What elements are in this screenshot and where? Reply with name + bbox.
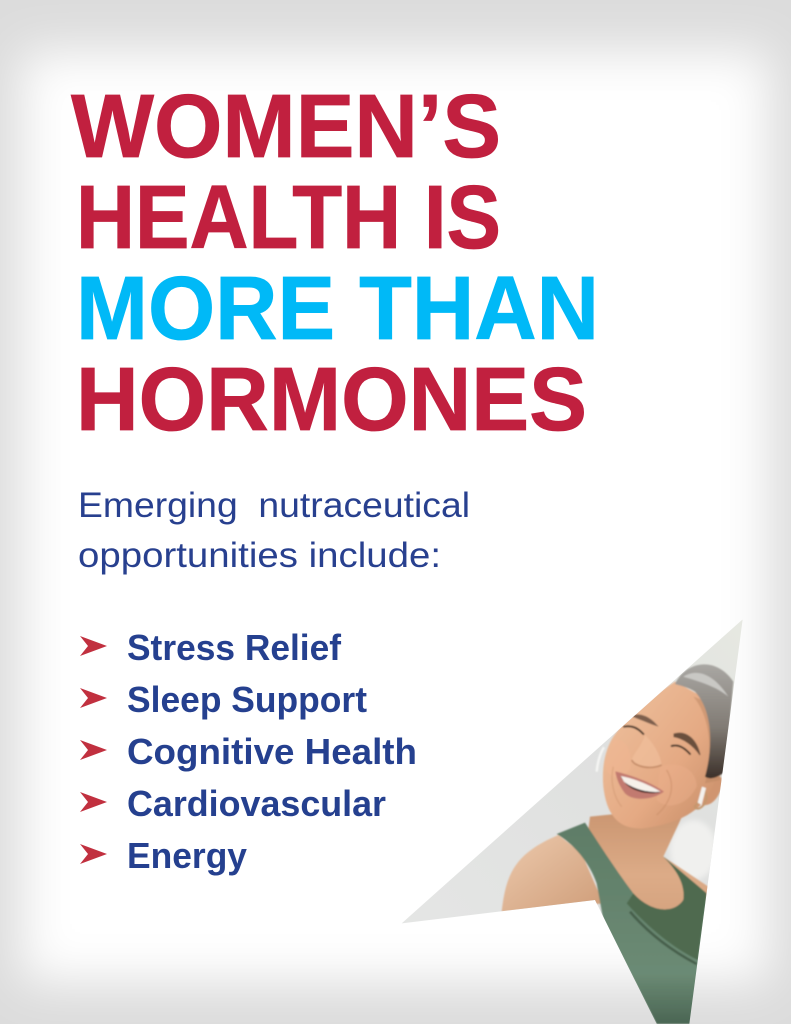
- item: Stress Relief: Stress Relief: [127, 627, 342, 668]
- item: Energy: Energy: [127, 835, 247, 876]
- hair: [675, 664, 733, 778]
- title: WOMEN’S: [71, 77, 501, 177]
- list of opportunities: [80, 627, 417, 876]
- chest and neck: [588, 814, 708, 910]
- earring: [695, 788, 707, 809]
- item: Sleep Support: Sleep Support: [127, 679, 367, 720]
- nose: [632, 737, 661, 766]
- eyes: [624, 726, 643, 734]
- tank top: [557, 823, 707, 1024]
- title: MORE THAN: [76, 259, 599, 359]
- intro text: opportunities include:: [78, 536, 441, 575]
- intro text: [78, 486, 470, 575]
- eyebrows: [633, 715, 656, 725]
- earbud: [597, 747, 604, 772]
- arm: [502, 835, 603, 912]
- title: HORMONES: [76, 350, 587, 450]
- photo: smiling woman in arrow shape: [402, 620, 742, 1024]
- item: Cognitive Health: Cognitive Health: [127, 731, 417, 772]
- smile lines: [666, 770, 672, 806]
- title: HEALTH IS: [76, 168, 501, 268]
- item: Cardiovascular: Cardiovascular: [127, 783, 386, 824]
- intro text: Emerging nutraceutical: [78, 486, 470, 525]
- title: [71, 77, 599, 450]
- ear: [702, 776, 722, 805]
- mouth: [615, 771, 664, 799]
- face: [603, 682, 718, 828]
